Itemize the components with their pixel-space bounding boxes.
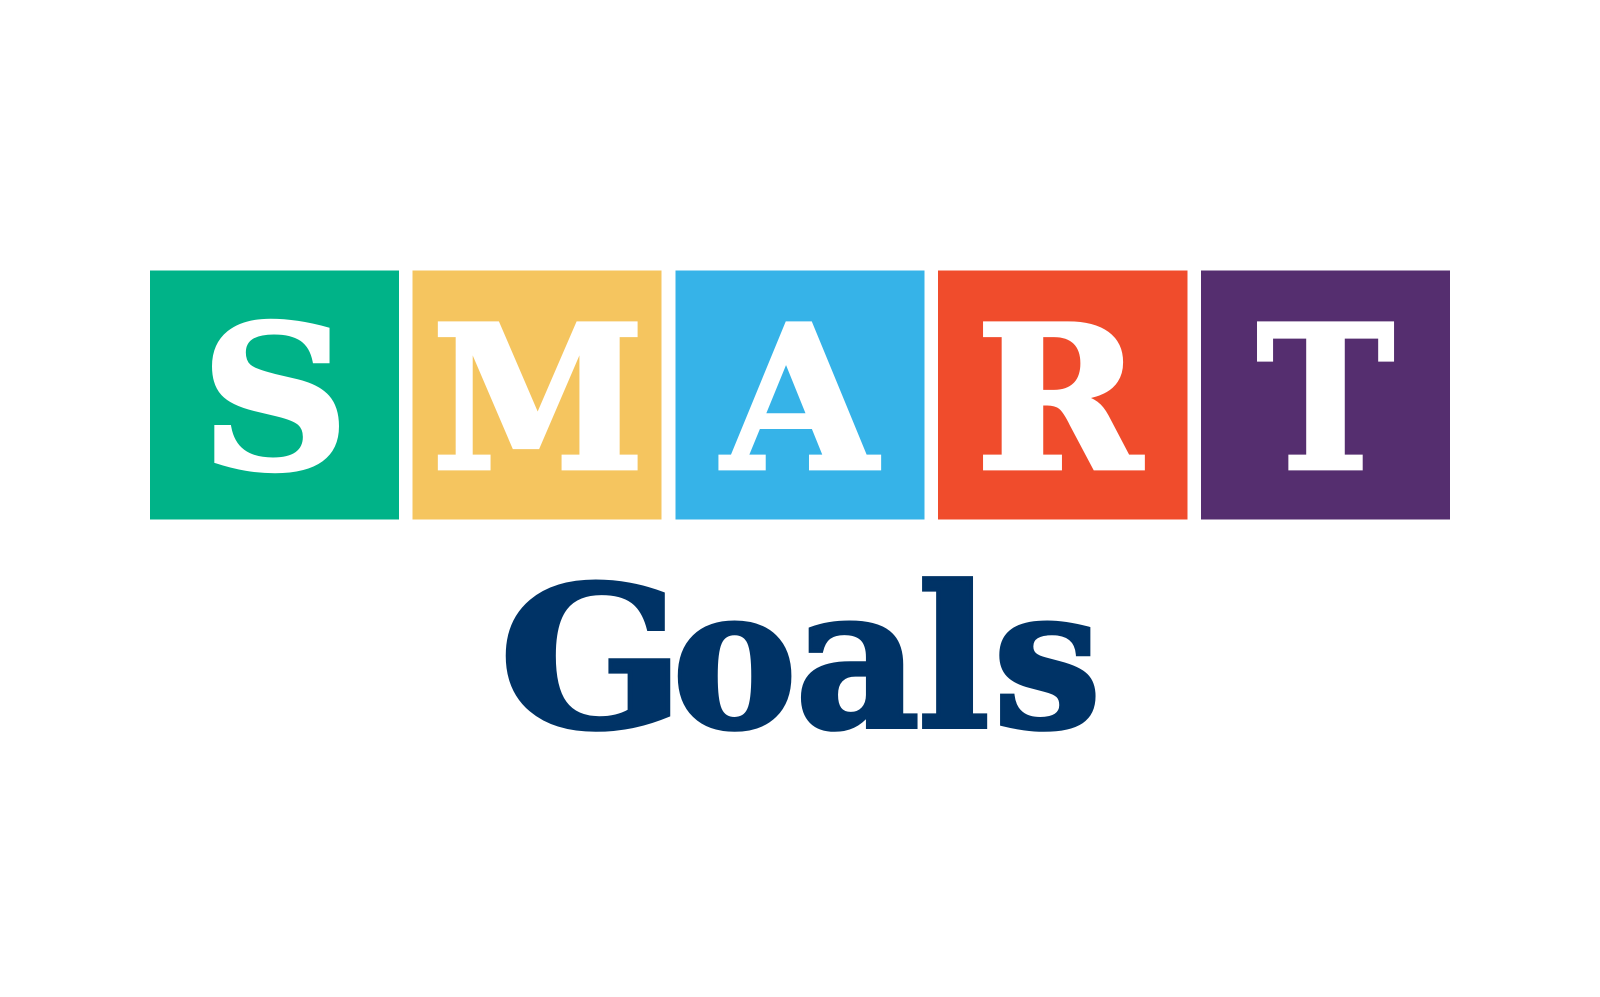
heading: Goals: a	[795, 544, 920, 774]
tile: T	[1201, 270, 1450, 520]
tile: R	[938, 270, 1188, 520]
heading: Goals: G	[499, 544, 685, 774]
heading: Goals: o	[672, 544, 797, 774]
tile: R: R	[976, 281, 1143, 515]
tile: A: A	[720, 281, 880, 515]
tile: S: S	[200, 281, 349, 515]
tile: A	[676, 270, 924, 520]
heading: Goals: l	[918, 544, 990, 774]
tile: S	[150, 270, 399, 520]
tile: M: M	[432, 281, 645, 515]
heading: Goals: s	[993, 544, 1102, 774]
tile: T: T	[1257, 281, 1394, 515]
